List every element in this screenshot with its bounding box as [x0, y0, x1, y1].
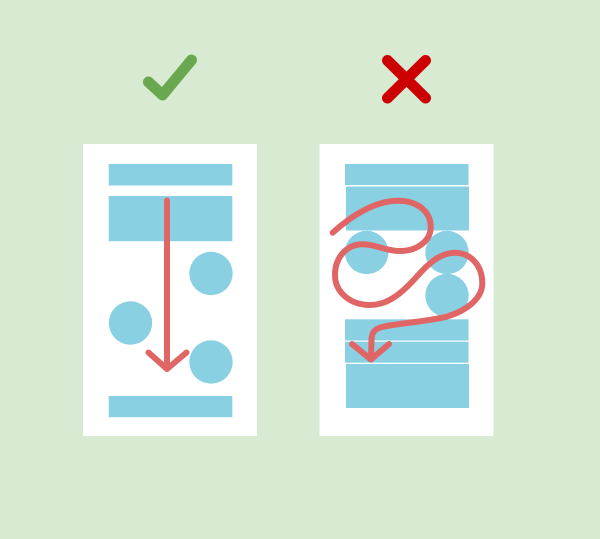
arrow: straight reading path: [148, 200, 186, 369]
circle: upper right: [425, 231, 469, 274]
page background: bad layout: [320, 144, 494, 436]
icon: red cross: [388, 60, 426, 98]
lower bar two: [345, 342, 468, 363]
circle: lower right: [189, 340, 233, 384]
footer bar: [109, 396, 232, 417]
top bar: [345, 164, 468, 185]
lower bar one: [345, 319, 468, 340]
header bar: [109, 164, 232, 186]
arrow: tangled reading path: [333, 201, 482, 360]
page background: good layout: [83, 144, 257, 436]
bottom block: [346, 364, 469, 408]
circle: upper right: [189, 252, 233, 295]
hero block: [109, 196, 232, 241]
panel: good layout: [83, 144, 257, 436]
circle: lower right: [425, 274, 469, 317]
icon: green check mark: [148, 60, 192, 95]
circle: middle left: [109, 301, 152, 345]
circle: left: [345, 231, 388, 274]
upper block: [346, 186, 469, 230]
panel: bad layout: [320, 144, 494, 436]
